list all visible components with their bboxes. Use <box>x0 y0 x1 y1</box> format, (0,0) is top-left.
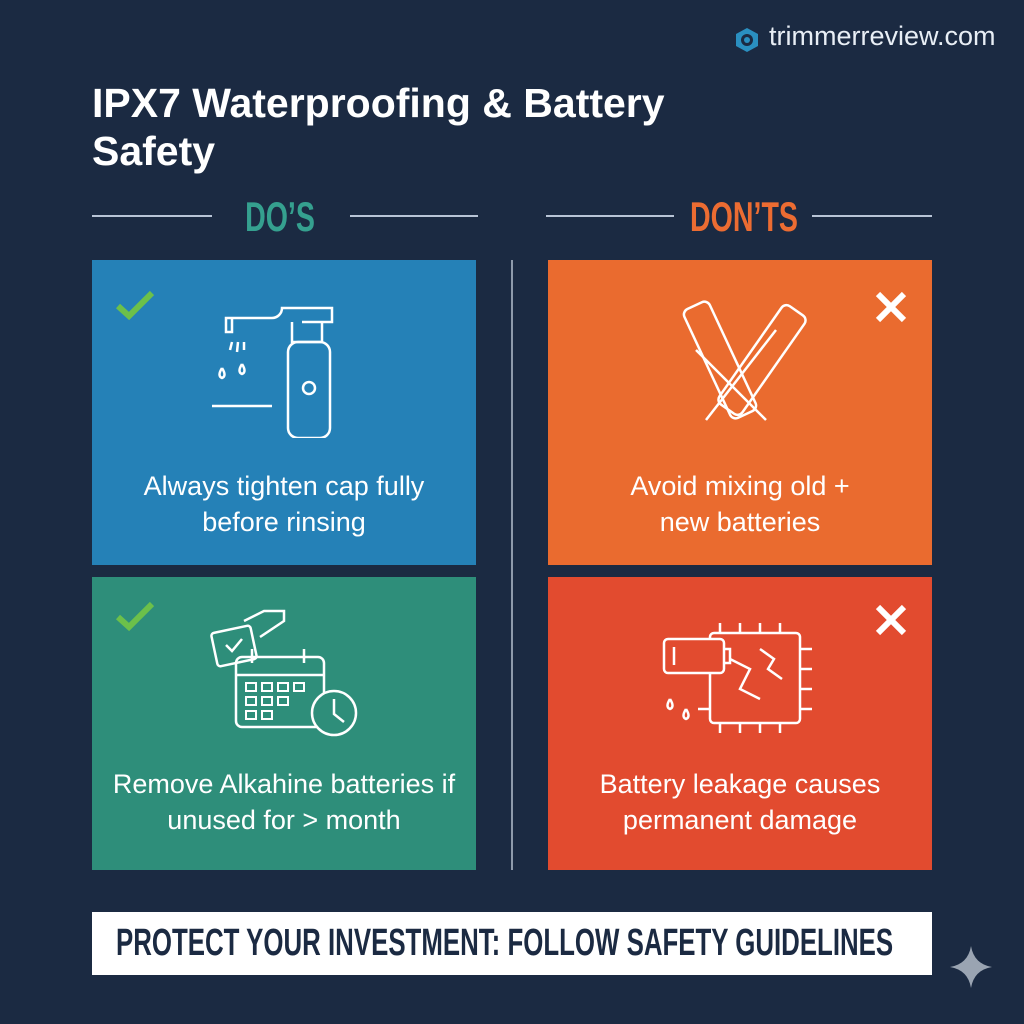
title <box>92 80 665 174</box>
text: before rinsing <box>202 507 366 537</box>
icon: leaking battery chip <box>662 623 812 733</box>
logo: trimmerreview.com <box>769 21 996 51</box>
text <box>630 471 850 537</box>
text: Always tighten cap fully <box>144 471 424 501</box>
text <box>144 471 424 537</box>
icon: calendar <box>210 610 358 736</box>
icon: x <box>876 604 906 636</box>
banner <box>92 912 932 975</box>
panel: do 2 <box>92 577 476 870</box>
text: Avoid mixing old + <box>630 471 850 501</box>
text <box>113 769 456 835</box>
text: permanent damage <box>623 805 857 835</box>
panel: do 1 <box>92 260 476 565</box>
text <box>600 769 880 835</box>
text: Battery leakage causes <box>600 769 880 799</box>
divider <box>511 260 513 870</box>
text: Remove Alkahine batteries if <box>113 769 455 799</box>
icon: sparkle <box>950 946 992 988</box>
heading: don'ts: DON’TS <box>690 193 798 240</box>
heading: do's: DO’S <box>245 193 315 240</box>
panel: dont 1 <box>548 260 932 565</box>
icon: faucet bottle <box>212 306 334 438</box>
panel: dont 2 <box>548 577 932 870</box>
icon: x <box>876 292 906 322</box>
title: IPX7 Waterproofing & Battery <box>92 80 665 126</box>
icon: check <box>116 291 154 320</box>
icon: check <box>116 602 154 631</box>
banner: PROTECT YOUR INVESTMENT: FOLLOW SAFETY GUIDELINES <box>116 922 893 964</box>
icon: crossed batteries <box>682 300 807 421</box>
title: Safety <box>92 128 215 174</box>
text: unused for > month <box>167 805 401 835</box>
text: new batteries <box>660 507 820 537</box>
